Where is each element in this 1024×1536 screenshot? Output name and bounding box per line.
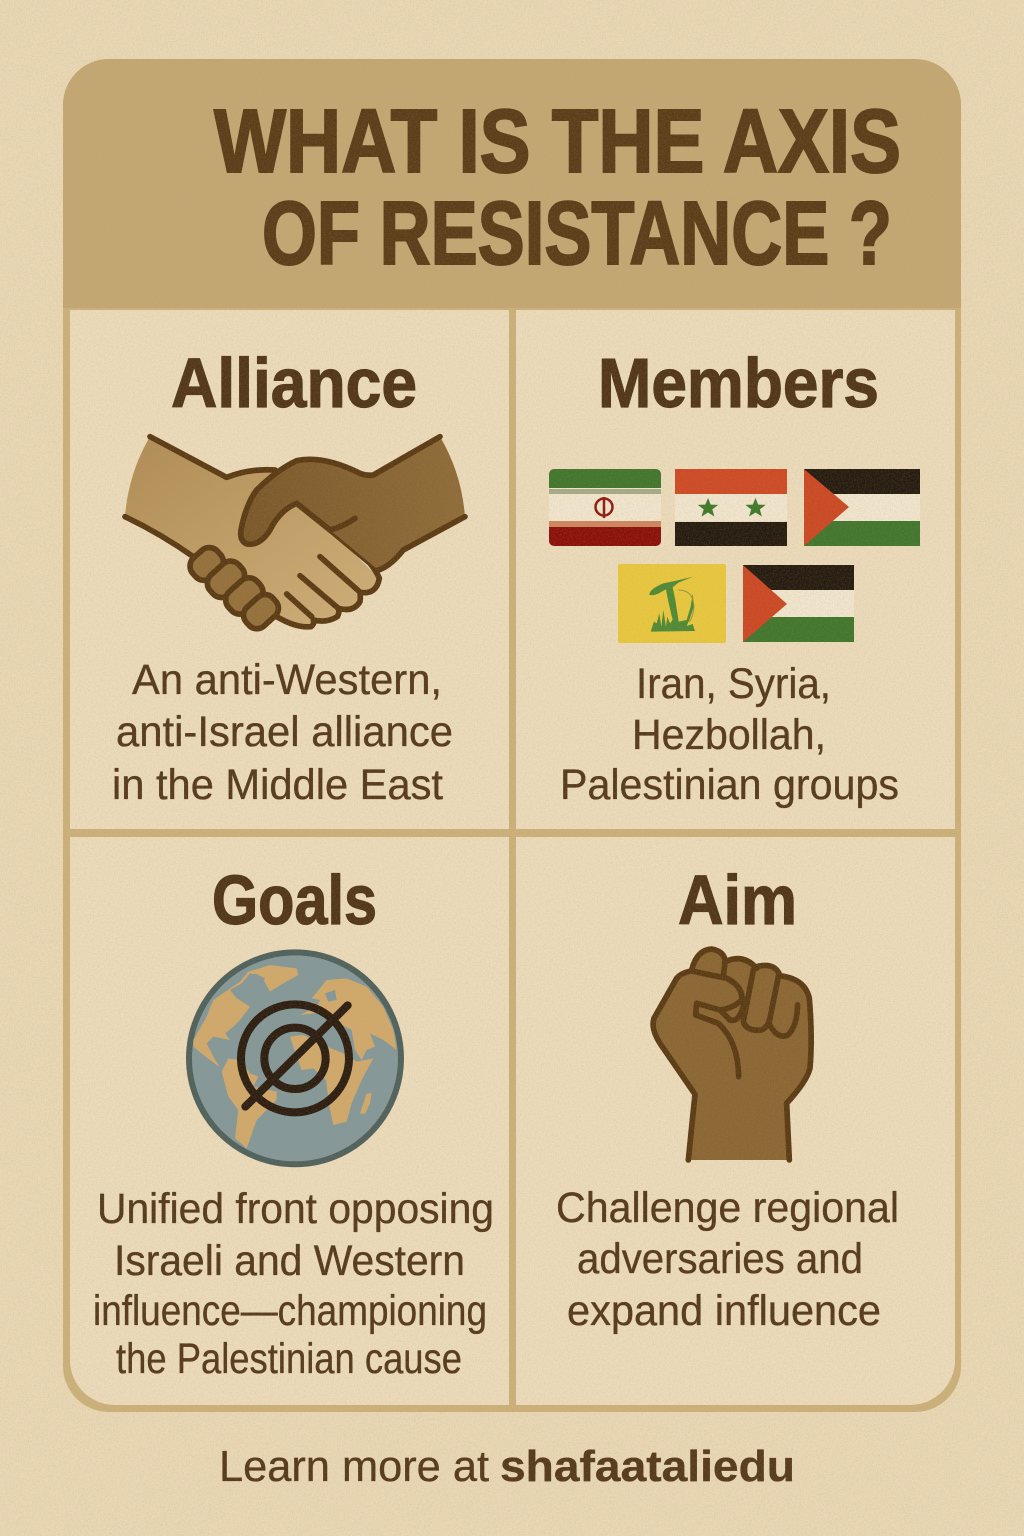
text: aim description xyxy=(556,1184,899,1335)
icon: flag of Palestine (second) xyxy=(743,565,854,642)
icon: flag of Hezbollah xyxy=(618,564,726,643)
text: members list: Iran, Syria, xyxy=(636,660,831,708)
title xyxy=(214,92,901,284)
text: alliance description xyxy=(112,656,453,809)
icon: flag of Palestine xyxy=(804,469,920,546)
icon: handshake xyxy=(125,437,465,633)
icon: flag of Syria xyxy=(675,469,787,546)
text: aim description: Challenge regional xyxy=(556,1184,899,1232)
text: alliance description: anti-Israel alliance xyxy=(116,708,453,756)
main card xyxy=(63,59,961,1412)
icon: globe with target xyxy=(189,952,401,1164)
heading: goals: Goals xyxy=(212,861,377,939)
text: alliance description: in the Middle East xyxy=(112,761,443,809)
footer xyxy=(219,1442,795,1491)
heading: alliance: Alliance xyxy=(171,344,417,422)
title: WHAT IS THE AXIS xyxy=(214,92,901,192)
footer: Learn more at xyxy=(219,1442,489,1491)
panel: goals xyxy=(70,837,509,1405)
text: aim description: expand influence xyxy=(567,1287,881,1335)
icon: flag of Iran xyxy=(549,469,661,546)
text: goals description: Israeli and Western xyxy=(114,1237,465,1285)
text: goals description xyxy=(93,1185,494,1383)
text: goals description: the Palestinian cause xyxy=(116,1335,462,1383)
text: goals description: Unified front opposing xyxy=(97,1185,494,1233)
text: members list: Hezbollah, xyxy=(632,711,826,759)
panel: alliance xyxy=(70,310,509,829)
text: members list: Palestinian groups xyxy=(560,761,899,809)
panel: members xyxy=(516,310,955,829)
panel: aim xyxy=(516,837,955,1405)
heading: aim: Aim xyxy=(678,861,797,939)
text: goals description: influence—championing xyxy=(93,1287,487,1335)
text: alliance description: An anti-Western, xyxy=(132,656,442,704)
text: aim description: adversaries and xyxy=(577,1235,863,1283)
footer: shafaataliedu xyxy=(500,1442,795,1491)
text: members list xyxy=(560,660,899,809)
header band xyxy=(63,59,961,308)
icon: raised fist xyxy=(653,949,811,1160)
heading: members: Members xyxy=(598,344,879,422)
